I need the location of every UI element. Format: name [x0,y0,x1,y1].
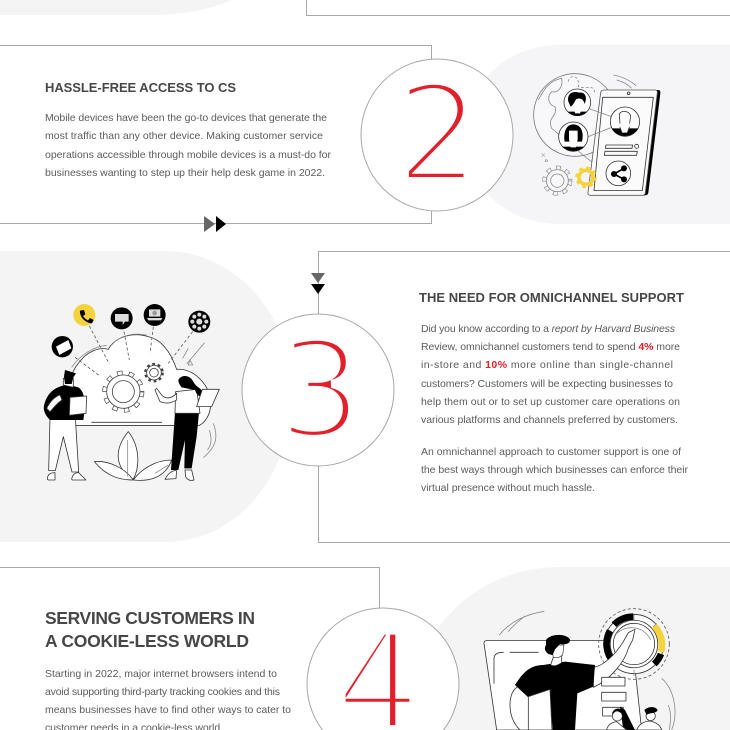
number circle 2 [361,56,513,213]
top partial grey panel [0,0,232,15]
heading: cookie-less world: A COOKIE-LESS WORLD [45,631,249,651]
text block: omnichannel body: help them out or to set up customer care operations on [421,396,680,408]
text block: cookie-less body: avoid supporting third-party tracking cookies and this [45,686,280,698]
icon: analyst with dashboard [484,609,675,730]
gears [105,364,162,410]
frame section 2 [0,46,432,224]
man with tablet [44,370,87,480]
channel icons [52,304,210,357]
tablet [588,90,660,195]
frame section 3 [318,252,730,542]
text block: omnichannel body: various platforms and channels preferred by customers. [421,414,678,426]
motion arcs [499,611,675,730]
motion lines [183,343,216,458]
text block: omnichannel body: An omnichannel approach to customer support is one of [421,446,681,458]
heading: hassle-free access: HASSLE-FREE ACCESS TO CS [45,80,236,95]
text block: omnichannel body: Did you know according to a report by Harvard Business [421,323,676,335]
gears [542,153,595,193]
text block: hassle-free access body: operations accessible through mobile devices is a must-do for [45,149,332,161]
text block: cookie-less body: means businesses have to find other ways to cater to [45,704,291,716]
text block: hassle-free access body: most traffic than any other device. Making customer service [45,130,323,142]
heading: cookie-less world [45,608,255,651]
text block: omnichannel body [421,323,688,494]
panel: grey backdrop section 3 [0,251,292,542]
icon: cloud support team [44,304,219,480]
small people [607,707,662,730]
text block: omnichannel body: customers? Customers will be expecting businesses to [421,378,673,390]
woman with tablet [155,376,219,480]
arrow: section 2 connector [204,216,226,232]
text block: omnichannel body: the best ways through which businesses can enforce their [421,464,688,476]
cloud [70,335,211,426]
heading: cookie-less world: SERVING CUSTOMERS IN [45,608,255,628]
panel: grey backdrop section 2 [465,45,730,224]
monitor [484,641,642,730]
ring chart [599,609,669,679]
text block: omnichannel body: in-store and 10% more online than single-channel [421,359,673,371]
number circle 2: 2 [395,56,481,213]
number circle 4 [307,604,459,730]
globe [534,74,636,162]
text block: hassle-free access body: Mobile devices have been the go-to devices that generate the [45,112,327,124]
text block: hassle-free access body: businesses wanting to step up their help desk game in 2022. [45,167,325,179]
arrow: section 3 connector [311,273,325,294]
baseline [76,422,177,426]
leaves [94,432,172,480]
man [510,629,635,730]
frame section 4 [0,568,380,730]
text block: cookie-less body [45,668,291,730]
dashed connectors [75,326,193,376]
number circle 3 [242,312,394,469]
text block: omnichannel body: Review, omnichannel customers tend to spend 4% more [421,341,680,353]
avatars [559,89,640,151]
text block: omnichannel body: virtual presence without much hassle. [421,482,595,494]
number circle 3: 3 [277,312,363,469]
text block: cookie-less body: Starting in 2022, major internet browsers intend to [45,668,277,680]
dashboard bars [602,677,626,716]
top frame for previous section [306,0,730,16]
heading: omnichannel support: THE NEED FOR OMNICHANNEL SUPPORT [419,290,684,305]
panel: grey backdrop section 4 [405,567,730,730]
text block: hassle-free access body [45,112,332,179]
icon: phone, globe and support agents [534,74,660,195]
